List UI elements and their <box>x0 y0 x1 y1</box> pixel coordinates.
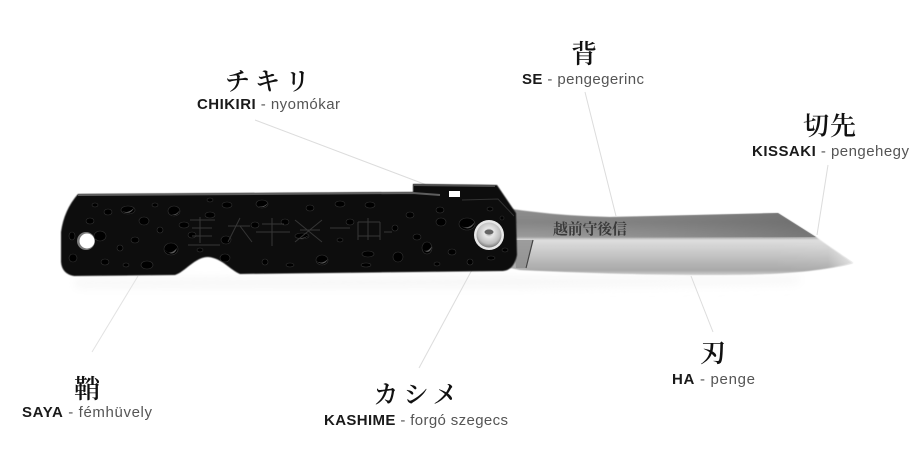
handle <box>61 184 517 276</box>
label: saya <box>22 375 152 421</box>
label: saya: SAYA - fémhüvely <box>22 404 152 421</box>
label: kashime: KASHIME - forgó szegecs <box>324 412 508 429</box>
label: kissaki <box>752 112 910 160</box>
rivet <box>474 220 504 250</box>
leader line: kashime <box>419 242 487 368</box>
blade <box>510 209 853 275</box>
label: chikiri: チキリ <box>225 69 315 96</box>
label: kashime <box>324 382 508 429</box>
leader line: chikiri <box>255 120 432 187</box>
knife <box>61 184 853 276</box>
knife shadow <box>75 277 800 287</box>
lanyard hole <box>77 232 95 250</box>
label: kashime: カシメ <box>373 382 463 409</box>
top edge highlight <box>78 193 440 195</box>
label: ha: 刃 <box>700 339 726 368</box>
droplets <box>69 198 508 269</box>
label: se: 背 <box>571 40 597 69</box>
label: kissaki: KISSAKI - pengehegy <box>752 143 910 160</box>
label: kissaki: 切先 <box>803 112 857 141</box>
handle engraving <box>188 217 392 246</box>
label: chikiri <box>197 69 340 113</box>
droplet highlights <box>122 203 475 264</box>
slider window <box>449 191 460 197</box>
label: chikiri: CHIKIRI - nyomókar <box>197 96 340 113</box>
label: se: SE - pengegerinc <box>522 71 644 88</box>
label: ha: HA - penge <box>672 371 755 388</box>
leader line: ha <box>691 276 713 332</box>
blade engraving: 越前守後信 <box>553 218 627 239</box>
label: se <box>522 40 644 88</box>
leader line: saya <box>92 276 138 352</box>
leader line: kissaki <box>817 165 828 235</box>
label: ha <box>672 339 755 388</box>
leader line: se <box>585 92 616 216</box>
label: saya: 鞘 <box>74 375 102 404</box>
